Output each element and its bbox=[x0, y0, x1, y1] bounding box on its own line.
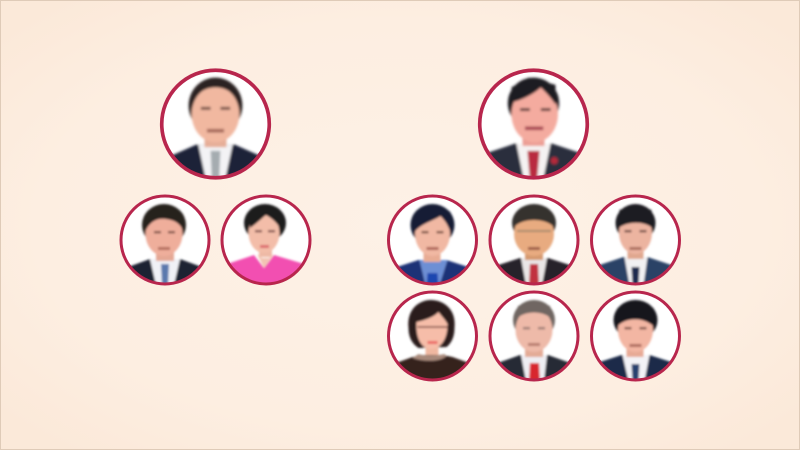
portrait: older man with red tie bbox=[489, 292, 579, 381]
portrait: woman with glasses bbox=[388, 292, 478, 381]
portrait: top right leader bbox=[479, 70, 588, 179]
portrait: man with glasses and red tie bbox=[489, 196, 579, 285]
portrait: man, second row left group bbox=[120, 196, 210, 285]
portrait: man in blue shirt bbox=[388, 196, 478, 285]
portrait: man in navy suit bbox=[590, 196, 680, 285]
portrait: man with dark hair and navy tie bbox=[590, 292, 680, 381]
portrait: woman in pink, second row left group bbox=[221, 196, 311, 285]
portrait: top left leader bbox=[161, 70, 270, 179]
